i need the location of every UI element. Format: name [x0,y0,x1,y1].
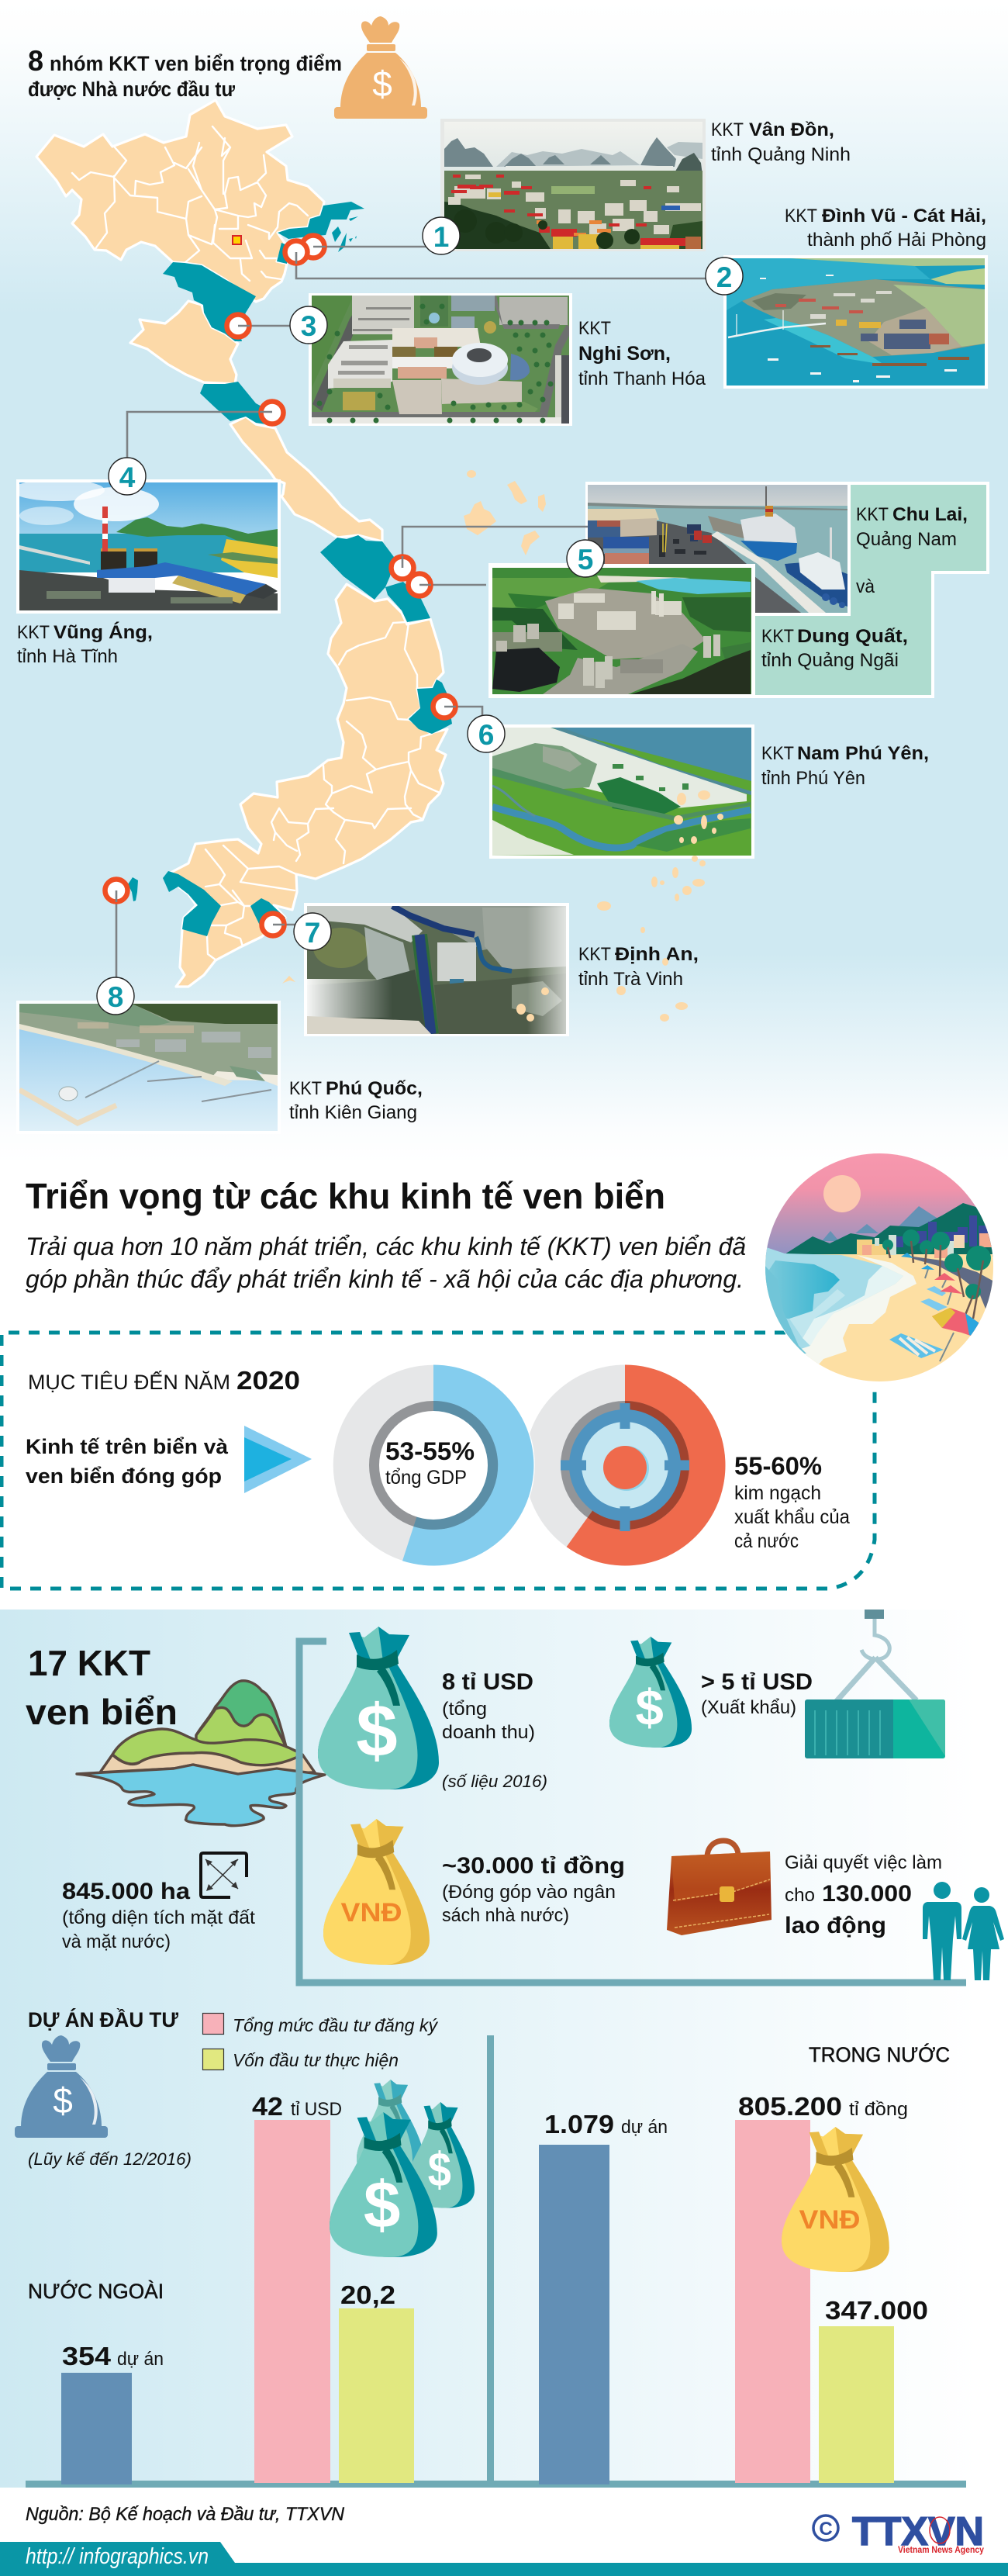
label: Dinh Vu - Cat Hai [785,206,986,251]
value: 55-60% of exports: 55-60% [734,1452,822,1480]
badge 2: 2 [716,261,732,293]
badge 7 [294,913,331,950]
label: Dung Quat [761,626,908,671]
badge 4: 4 [119,462,136,493]
label: Chu Lai: Quảng Nam [856,529,957,550]
stat: total area: (tổng diện tích mặt đất [62,1907,255,1928]
footer bar with url [0,2542,1008,2576]
donut chart: export share 55-60% [524,1365,726,1566]
bar: foreign projects 354 [61,2342,164,2484]
icon: VND bag domestic [782,2127,889,2272]
illustration: beach circle [764,1152,998,1388]
icon: VND bag domestic: VNĐ [799,2205,861,2235]
icon: money bag: $ [372,64,392,104]
text: sea economy contribution [26,1435,229,1488]
label: Dung Quat: KKT [761,626,794,647]
label: Nam Phu Yen: tỉnh Phú Yên [761,768,865,789]
stat: jobs: Giải quyết việc làm [785,1852,942,1873]
bar: foreign registered 42: 42 [252,2092,283,2121]
label: Chu Lai [856,504,968,597]
map of Vietnam [36,100,546,987]
bar: domestic registered 805.200 [735,2092,908,2483]
logo: TTXVN: C [819,2519,833,2540]
icon: area square [201,1853,247,1897]
label: Dinh An: tỉnh Trà Vinh [578,969,683,990]
label: Nam Phu Yen: Nam Phú Yên, [797,743,929,764]
value: 55-60% of exports [734,1452,850,1552]
label: Dinh An: KKT [578,944,611,965]
label: Vung Ang: Vũng Áng, [54,621,153,643]
title: 8 key coastal economic zones [28,45,342,101]
label: Dinh An [578,944,699,990]
bar: domestic registered 805.200: tỉ đồng [849,2099,908,2120]
heading: 17 coastal zones [26,1643,178,1732]
bar: foreign registered 42 [252,2092,342,2483]
label: Chu Lai: Chu Lai, [892,504,968,525]
stat: jobs: 130.000 [822,1881,912,1907]
text: sea economy contribution: Kinh tế trên biển và [26,1435,229,1458]
label: Nghi Son: Nghi Sơn, [578,343,671,365]
panel: photo Van Don [440,119,706,251]
map: land provinces [36,100,447,987]
bar: domestic projects 1.079 [539,2110,668,2484]
icon: small dollar bag [609,1637,692,1748]
bar: foreign projects 354: dự án [117,2349,164,2370]
stat: jobs [785,1852,942,1938]
badge 3: 3 [301,310,316,342]
background: map section [0,0,1008,1164]
stat: state budget [442,1853,625,1926]
label: Vung Ang [17,621,153,667]
heading: 17 coastal zones: 17 KKT [28,1643,150,1683]
label: Phu Quoc: KKT [289,1078,322,1099]
legend: Tổng mức đầu tư đăng ký [233,2015,438,2035]
footer bar with url: http:// infographics.vn [26,2544,209,2569]
label: target 2020 [28,1366,300,1395]
badge 1: 1 [433,221,449,253]
panel: photo Chu Lai [588,485,847,614]
label: target 2020: 2020 [236,1366,300,1395]
badge 2 [706,258,743,295]
stat: total revenue: doanh thu) [442,1722,535,1743]
stat: state budget: ~30.000 tỉ đồng [442,1853,625,1879]
icon: blue money bag [15,2035,108,2138]
title: 8 key coastal economic zones: được Nhà nước đầu tư [28,78,235,101]
background: statistics section [0,1610,1008,2488]
label: domestic: TRONG NƯỚC [809,2042,950,2066]
panel: photo Dinh Vu - Cat Hai [723,255,988,389]
icon: blue money bag: $ [53,2080,73,2121]
bar: foreign implemented 20,2 [339,2280,414,2483]
donut chart: GDP share 53-55% [333,1364,534,1566]
map: Spratly islands [516,790,723,1022]
heading: prospects: Triển vọng từ các khu kinh tế ven biển [26,1176,665,1216]
stat: state budget: (Đóng góp vào ngân [442,1882,616,1903]
icon: money bag [334,16,427,119]
stat: state budget: sách nhà nước) [442,1905,569,1926]
label: Phu Quoc: tỉnh Kiên Giang [289,1102,417,1123]
panel: photo Vung Ang [12,479,281,614]
label: Nghi Son: tỉnh Thanh Hóa [578,368,706,389]
map: Con Dao island [282,976,295,984]
arrow: pointing to charts [244,1426,312,1493]
icon: briefcase [667,1841,772,1935]
badge 8 [97,977,134,1015]
badge 5: 5 [578,544,593,576]
label: Chu Lai: KKT [856,504,889,525]
icon: VND bag: VNĐ [341,1898,402,1928]
note: cumulative: (Lũy kế đến 12/2016) [28,2149,192,2169]
value: 55-60% of exports: kim ngạch [734,1482,821,1504]
stat: total revenue: (tổng [442,1699,487,1720]
value: 53-55% of GDP: tổng GDP [385,1467,467,1489]
icon: man and woman [923,1882,1004,1980]
stat: total area: và mặt nước) [62,1931,171,1952]
illustration: island [77,1681,325,1826]
icon: three dollar bags [330,2080,475,2257]
stat: exports: (Xuất khẩu) [701,1697,796,1718]
panel: photo Nam Phu Yen [489,724,754,859]
value: 53-55% of GDP: 53-55% [385,1437,475,1465]
stat: exports [701,1669,813,1718]
text: sea economy contribution: ven biển đóng góp [26,1464,222,1488]
bar: domestic projects 1.079: 1.079 [544,2110,614,2139]
badge 5 [567,540,604,577]
map: Paracel islands [464,470,546,555]
label: Nghi Son [578,318,706,389]
bar: foreign implemented 20,2: 20,2 [340,2280,395,2309]
label: Phu Quoc: Phú Quốc, [326,1078,423,1099]
panel: photo Dung Quat [488,564,755,698]
icon: small dollar bag: $ [636,1679,664,1736]
bar: domestic projects 1.079: dự án [621,2117,668,2138]
icon: large dollar bag [318,1627,439,1789]
marker: Hanoi capital [233,236,241,244]
map: highlighted coastal provinces [128,202,452,936]
panel: photo Nghi Son [307,293,572,426]
bar: domestic registered 805.200: 805.200 [738,2092,842,2121]
bracket frame [299,1641,966,1983]
icon: three dollar bags: $ [428,2143,451,2197]
stat: total revenue: (số liệu 2016) [442,1772,547,1791]
bar: foreign registered 42: tỉ USD [291,2099,342,2120]
label: Vung Ang: KKT [17,622,50,643]
legend [203,2014,438,2070]
heading: investment projects: DỰ ÁN ĐẦU TƯ [28,2007,179,2031]
badge 1 [423,217,460,254]
label: Dung Quat: tỉnh Quảng Ngãi [761,650,899,671]
stat: total revenue: 8 tỉ USD [442,1669,533,1695]
logo: TTXVN: TTXVN [852,2509,984,2554]
value: 55-60% of exports: xuất khẩu của [734,1506,850,1528]
stat: jobs: cho [785,1885,815,1906]
label: Van Don: Vân Đồn, [749,119,834,140]
intro paragraph [26,1233,746,1293]
intro paragraph: Trải qua hơn 10 năm phát triển, các khu kinh tế (KKT) ven biển đã [26,1233,746,1260]
axis: base and divider [26,2035,966,2488]
badge 6 [468,715,505,752]
icon: three dollar bags: $ [364,2169,400,2242]
label: foreign: NƯỚC NGOÀI [28,2279,164,2303]
panel: photo Dinh An [304,903,569,1036]
icon: large dollar bag: $ [356,1689,398,1772]
label: Dinh An: Định An, [615,944,699,965]
label: target 2020: MỤC TIÊU ĐẾN NĂM [28,1370,230,1394]
icon: container on crane hook [805,1610,945,1758]
bar: domestic implemented 347.000 [819,2296,928,2483]
label: Nam Phu Yen [761,743,929,789]
badge 7: 7 [305,917,320,949]
label: Nam Phu Yen: KKT [761,743,794,764]
label: Van Don: tỉnh Quảng Ninh [711,144,851,165]
label: Dinh Vu - Cat Hai: KKT [785,206,817,226]
label: Dinh Vu - Cat Hai: Đình Vũ - Cát Hải, [822,206,986,226]
label: Chu Lai: và [856,576,875,597]
badge 4 [109,458,146,495]
title: 8 key coastal economic zones: nhóm KKT ven biển trọng điểm [50,52,342,75]
map: province borders [72,126,440,960]
label: Van Don: KKT [711,119,744,140]
value: 53-55% of GDP [385,1437,475,1489]
logo: TTXVN: Vietnam News Agency [898,2544,984,2555]
heading: 17 coastal zones: ven biển [26,1692,178,1732]
badge 8: 8 [108,981,123,1013]
dashed border: 2020 targets [2,1333,875,1589]
stat: total area: 845.000 ha [62,1879,190,1904]
label: Van Don [711,119,851,165]
connector lines [116,247,724,979]
label: Phu Quoc [289,1078,423,1123]
value: 55-60% of exports: cả nước [734,1530,799,1552]
label: Dinh Vu - Cat Hai: thành phố Hải Phòng [807,230,986,251]
bar: foreign projects 354: 354 [62,2342,112,2370]
map markers: orange rings [105,236,456,935]
intro paragraph: góp phần thúc đẩy phát triển kinh tế - xã hội của các địa phương. [26,1265,744,1293]
stat: jobs: lao động [785,1913,886,1938]
label: Nghi Son: KKT [578,318,611,339]
badge 6: 6 [478,719,494,751]
stat: exports: > 5 tỉ USD [701,1669,813,1695]
panel: photo Phu Quoc [16,1001,281,1134]
stat: total area [62,1879,255,1952]
label: Vung Ang: tỉnh Hà Tĩnh [17,646,118,667]
source line: Nguồn: Bộ Kế hoạch và Đầu tư, TTXVN [26,2504,345,2525]
legend: Vốn đầu tư thực hiện [233,2050,399,2070]
title: 8 key coastal economic zones: 8 [28,45,43,77]
label: Dung Quat: Dung Quất, [797,626,908,647]
icon: VND bag [323,1819,430,1965]
stat: total revenue [442,1669,547,1791]
badge 3 [290,306,327,344]
panel: green label background for Chu Lai and Dung Quat [488,482,989,698]
bar: domestic implemented 347.000: 347.000 [825,2296,928,2325]
